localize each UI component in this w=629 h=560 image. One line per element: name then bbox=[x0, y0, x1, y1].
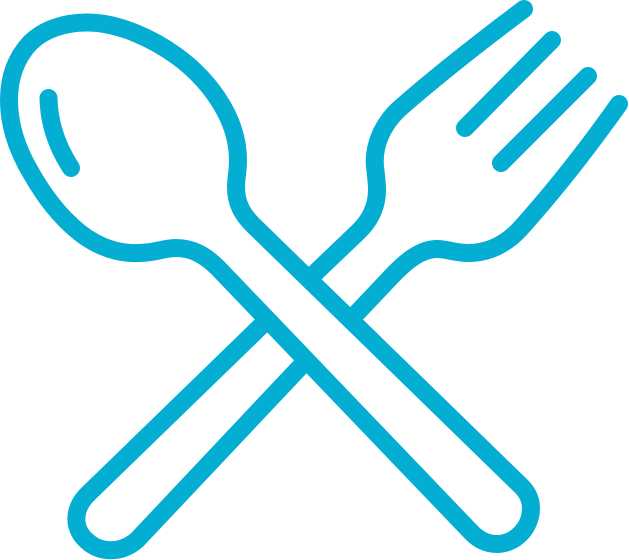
spoon outline bbox=[9, 22, 531, 544]
fork lower-right neck and outer tine bbox=[355, 104, 619, 315]
fork inner tine left bbox=[465, 40, 552, 128]
spoon highlight bbox=[48, 98, 71, 168]
fork inner tine right bbox=[501, 76, 588, 163]
fork upper outline with outer tine bbox=[312, 9, 524, 276]
icon: spoon bbox=[9, 22, 531, 544]
fork handle bbox=[76, 325, 302, 550]
